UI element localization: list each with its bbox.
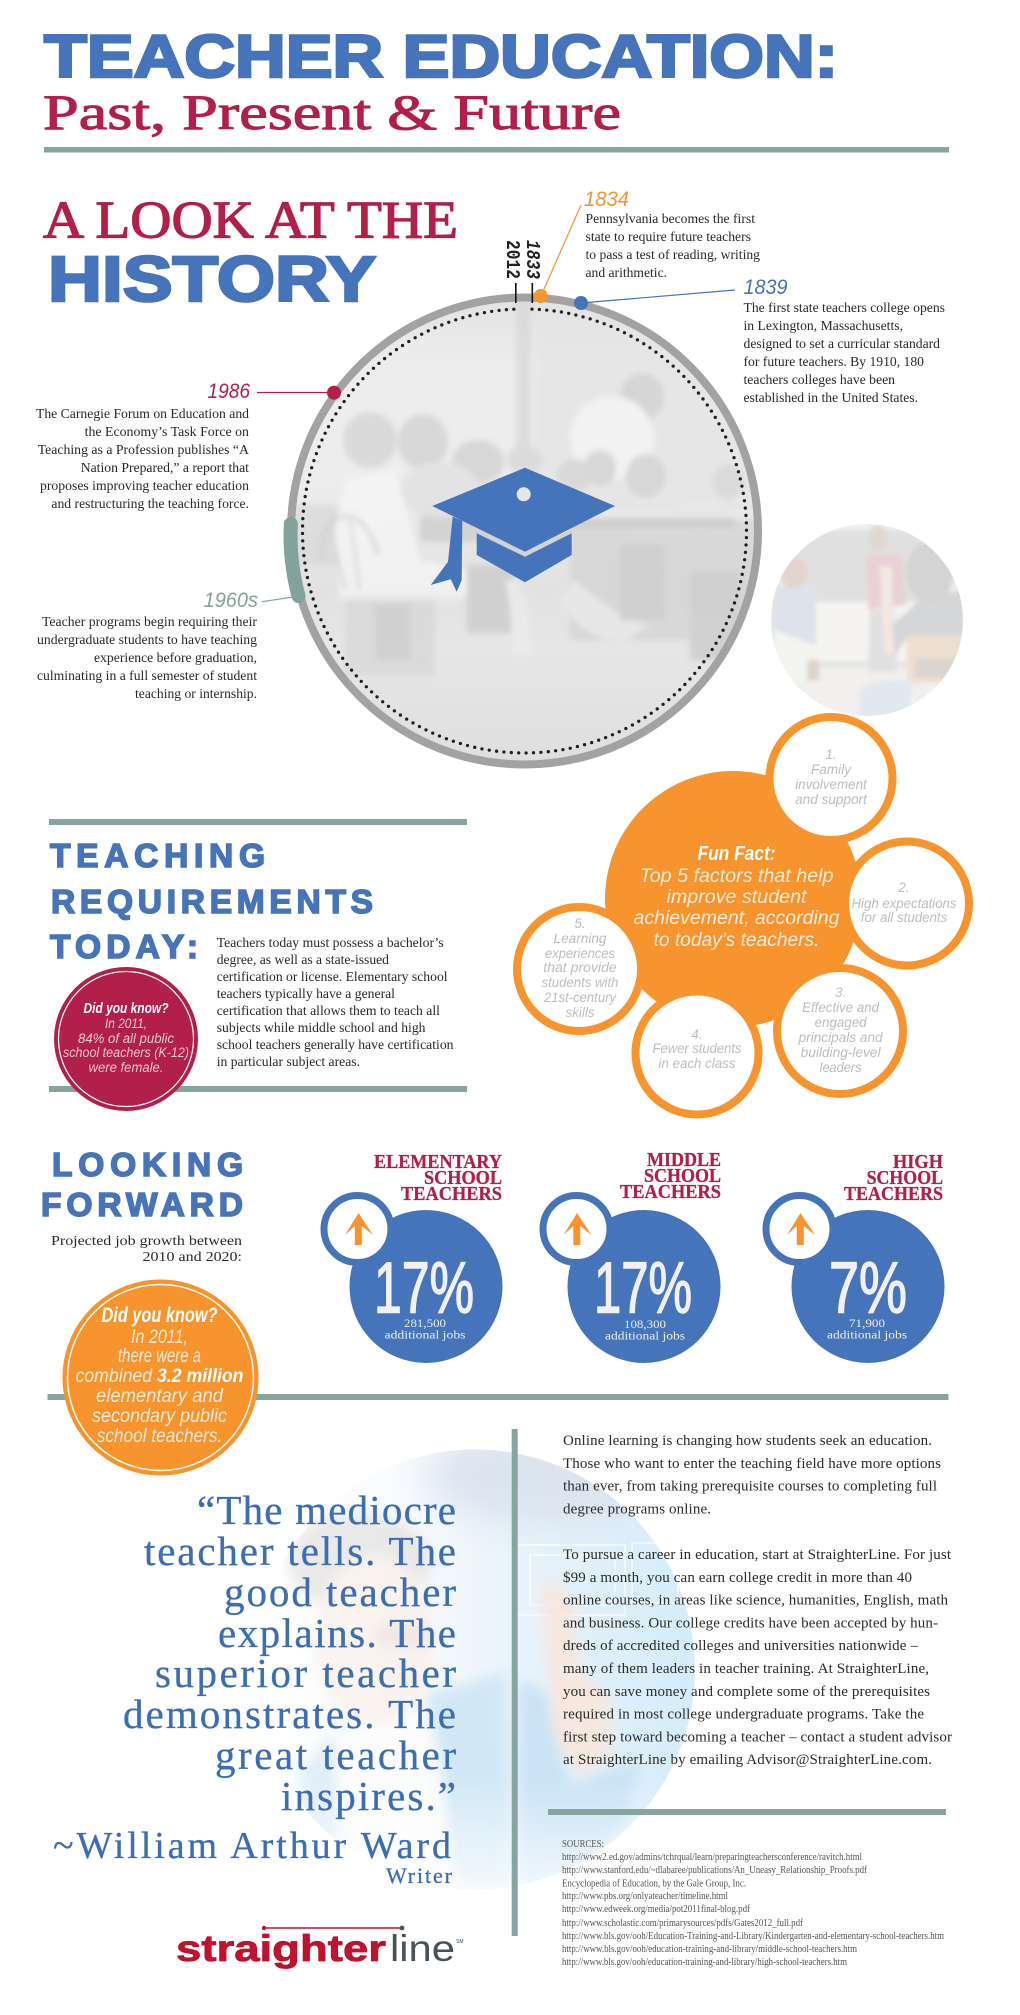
text block: call to action: you can save money and complete some of the prerequisites [563, 1684, 930, 1700]
stat: middle school teachers: 17% [594, 1248, 692, 1328]
callout: did you know, 3.2 million: Did you know? [102, 1304, 218, 1327]
callout: did you know, 3.2 million: school teachers. [97, 1426, 222, 1447]
stat: high school teachers: SCHOOL [867, 1167, 943, 1189]
stat: middle school teachers: additional jobs [605, 1328, 685, 1342]
stat: elementary school teachers: 17% [374, 1248, 474, 1328]
panel: teaching requirements today: REQUIREMENTS [51, 884, 373, 921]
sources list: http://www.pbs.org/onlyateacher/timeline.html [562, 1891, 728, 1902]
factor 5: 21st-century [543, 990, 617, 1005]
year ticks 2012 and 1833 [501, 240, 543, 303]
text block: call to action: $99 a month, you can earn college credit in more than 40 [563, 1570, 912, 1586]
logo: straighterline: straighter [176, 1928, 386, 1969]
timeline event: 1960s: teaching or internship. [135, 687, 257, 702]
panel: fun fact, top 5 factors [517, 717, 969, 1114]
icon: up arrow [345, 1213, 373, 1245]
text block [217, 936, 454, 1070]
text block: call to action: and business. Our college credits have been accepted by hun- [563, 1615, 938, 1631]
heading: a look at the history [43, 192, 458, 315]
timeline event: 1834: Pennsylvania becomes the first [586, 212, 755, 227]
factor 5 [517, 907, 641, 1031]
factor 3 [777, 968, 903, 1094]
text block: certification that allows them to teach all [217, 1004, 440, 1019]
stat: middle school teachers: MIDDLE [647, 1149, 721, 1171]
factor 5: Learning [554, 931, 607, 946]
text block: Teachers today must possess a bachelor’s [217, 936, 444, 951]
timeline event: 1839: The first state teachers college opens [744, 301, 945, 316]
subhead [51, 1234, 242, 1265]
timeline event: 1960s: culminating in a full semester of student [37, 669, 257, 684]
stat: elementary school teachers [324, 1151, 502, 1363]
icon: graduation cap [431, 468, 615, 592]
sources list: http://www.bls.gov/ooh/Education-Training-and-Library/Kindergarten-and-elementary-school-teachers.htm [562, 1931, 944, 1942]
logo: straighterline [176, 1926, 464, 1969]
outer ring [291, 298, 758, 764]
timeline event: 1839: in Lexington, Massachusetts, [744, 319, 903, 334]
sources list [562, 1839, 944, 1968]
quote: explains. The [218, 1610, 456, 1656]
panel: looking forward [41, 1147, 948, 1476]
factor 3: building-level [801, 1045, 882, 1060]
quote: teacher tells. The [144, 1528, 456, 1574]
sources list: http://www.bls.gov/ooh/education-training-and-library/high-school-teachers.htm [562, 1957, 847, 1968]
quote: inspires.” [281, 1773, 456, 1819]
heading: LOOKING [52, 1147, 243, 1184]
stat: middle school teachers: 108,300 [624, 1317, 666, 1331]
text block: call to action: degree programs online. [563, 1501, 711, 1517]
timeline event: 1986: Nation Prepared,” a report that [81, 461, 249, 476]
timeline event: 1839: designed to set a curricular standard [744, 337, 940, 352]
factor 1: and support [795, 792, 868, 807]
timeline event: 1834: state to require future teachers [586, 230, 751, 245]
callout: did you know, 3.2 million: combined 3.2 million [76, 1366, 244, 1387]
quote [53, 1487, 456, 1888]
subhead: Projected job growth between [51, 1234, 242, 1249]
timeline event: 1960s: experience before graduation, [94, 651, 257, 666]
factor 5: skills [566, 1005, 595, 1020]
quote: great teacher [215, 1732, 456, 1778]
photo: modern classroom [771, 524, 965, 720]
timeline event: 1986: The Carnegie Forum on Education and [36, 407, 249, 422]
factor 4: Fewer students [652, 1041, 742, 1056]
subtitle: Past, Present & Future [43, 84, 621, 140]
text block: degree, as well as a state-issued [217, 953, 389, 968]
year ticks 2012 and 1833: 2012 [501, 240, 523, 279]
factor 5: that provide [543, 960, 617, 975]
sources list: http://www.edweek.org/media/pot2011final-blog.pdf [562, 1904, 751, 1915]
fun fact circle: to today’s teachers. [654, 930, 820, 951]
factor 3: leaders [820, 1060, 862, 1075]
timeline event: 1960s: Teacher programs begin requiring their [42, 615, 257, 630]
quote: demonstrates. The [123, 1691, 456, 1737]
stat: elementary school teachers: SCHOOL [424, 1167, 502, 1189]
timeline event: 1834: to pass a test of reading, writing [586, 248, 760, 263]
factor 1: involvement [795, 777, 868, 792]
timeline event: 1960s [37, 524, 298, 702]
photo: vintage classroom [287, 293, 765, 769]
factor 3: engaged [815, 1015, 867, 1030]
panel: teaching requirements today: TODAY: [50, 929, 198, 966]
sources list: http://www.bls.gov/ooh/education-training-and-library/middle-school-teachers.htm [562, 1944, 857, 1955]
callout: did you know, 84% female [54, 967, 198, 1111]
timeline event: 1986 [36, 380, 341, 512]
timeline event: 1839: 1839 [744, 276, 788, 299]
fun fact circle: achievement, according [634, 908, 840, 929]
year ticks 2012 and 1833: 1833 [521, 240, 543, 280]
panel: looking forward: FORWARD [41, 1187, 243, 1224]
attribution: Writer [386, 1863, 453, 1888]
panel: teaching requirements today [49, 819, 467, 1111]
timeline event: 1839: teachers colleges have been [744, 373, 895, 388]
stat: elementary school teachers: TEACHERS [401, 1183, 502, 1205]
factor 3: principals and [798, 1030, 883, 1045]
attribution [53, 1825, 453, 1888]
factor 4 [636, 992, 758, 1114]
factor 5: 5. [574, 916, 586, 931]
sources list: http://www.scholastic.com/primarysources/pdfs/Gates2012_full.pdf [562, 1918, 804, 1929]
attribution: ~William Arthur Ward [53, 1825, 451, 1867]
text block: subjects while middle school and high [217, 1021, 426, 1036]
text block: school teachers generally have certification [217, 1038, 454, 1053]
callout: did you know, 84% female: were female. [88, 1060, 164, 1075]
callout: did you know, 84% female: 84% of all public [78, 1031, 174, 1046]
callout: did you know, 84% female: school teachers (K-12) [63, 1045, 189, 1060]
stat: high school teachers: HIGH [893, 1151, 943, 1173]
logo: straighterline: SM [456, 1939, 464, 1945]
stat: middle school teachers [543, 1149, 721, 1363]
timeline event: 1960s: 1960s [204, 589, 258, 612]
timeline event: 1839 [574, 276, 945, 406]
heading: a look at the history: HISTORY [48, 243, 376, 315]
quote: “The mediocre [197, 1487, 456, 1533]
text block: call to action: online courses, in areas like science, humanities, English, math [563, 1593, 948, 1609]
callout: did you know, 84% female: In 2011, [105, 1016, 147, 1031]
stat: elementary school teachers: 281,500 [404, 1316, 446, 1330]
text block: certification or license. Elementary school [217, 970, 448, 985]
stat: high school teachers: additional jobs [827, 1328, 907, 1342]
callout: did you know, 3.2 million: elementary and [96, 1386, 224, 1407]
timeline event: 1960s: undergraduate students to have teaching [37, 633, 257, 648]
main heading: TEACHER EDUCATION: [44, 23, 838, 90]
heading: TEACHING [50, 838, 265, 875]
stat: middle school teachers: TEACHERS [620, 1181, 721, 1203]
heading: a look at the history: A LOOK AT THE [43, 192, 458, 250]
text block: in particular subject areas. [217, 1055, 360, 1070]
factor 4: 4. [691, 1027, 703, 1042]
callout: did you know, 3.2 million [62, 1280, 258, 1476]
icon: up arrow [564, 1213, 592, 1245]
factor 1: Family [811, 762, 852, 777]
text block: call to action: required in most college undergraduate programs. Take the [563, 1707, 924, 1723]
factor 2: 2. [897, 880, 910, 895]
callout: did you know, 3.2 million: In 2011, [131, 1327, 188, 1348]
text block: call to action: To pursue a career in education, start at StraighterLine. For just [563, 1547, 952, 1563]
factor 2: for all students [861, 910, 947, 925]
timeline event: 1986: proposes improving teacher education [40, 479, 249, 494]
background student photo [285, 1450, 695, 1890]
quote: good teacher [224, 1569, 456, 1615]
sources list: http://www2.ed.gov/admins/tchrqual/learn/preparingteachersconference/ravitch.html [562, 1852, 862, 1863]
factor 5: students with [542, 975, 618, 990]
timeline event: 1986: Teaching as a Profession publishes “A [38, 443, 250, 458]
text block: call to action: at StraighterLine by emailing Advisor@StraighterLine.com. [563, 1752, 932, 1768]
timeline event: 1986: 1986 [208, 380, 250, 403]
icon: up arrow [787, 1213, 815, 1245]
text block: call to action: Those who want to enter the teaching field have more options [563, 1456, 941, 1472]
text block: call to action: than ever, from taking prerequisite courses to completing full [563, 1479, 937, 1495]
panel: history timeline circle [287, 240, 765, 769]
subhead: 2010 and 2020: [142, 1250, 242, 1265]
fun fact circle: Fun Fact: [698, 843, 776, 865]
stat: elementary school teachers: additional jobs [384, 1328, 466, 1342]
dotted ring [302, 309, 746, 753]
sources list: SOURCES: [562, 1839, 604, 1850]
text block: teachers typically have a general [217, 987, 395, 1002]
timeline event: 1834: 1834 [584, 188, 629, 211]
timeline event: 1986: the Economy’s Task Force on [85, 425, 249, 440]
callout: did you know, 3.2 million: there were a [118, 1346, 201, 1367]
factor 3: Effective and [802, 1000, 880, 1015]
fun fact circle [605, 771, 861, 1027]
timeline event: 1834: and arithmetic. [586, 266, 667, 281]
stat: elementary school teachers: ELEMENTARY [374, 1151, 502, 1173]
timeline event: 1834 [534, 188, 760, 303]
timeline event: 1839: established in the United States. [744, 391, 918, 406]
title [43, 23, 838, 140]
sources list: Encyclopedia of Education, by the Gale Group, Inc. [562, 1878, 746, 1890]
quote: superior teacher [155, 1650, 456, 1696]
stat: high school teachers: TEACHERS [844, 1183, 943, 1205]
fun fact circle: improve student [666, 887, 807, 908]
stat: high school teachers: 71,900 [849, 1316, 885, 1330]
factor 2: High expectations [852, 896, 957, 911]
factor 5: experiences [545, 946, 615, 961]
callout: did you know, 3.2 million: secondary public [92, 1406, 227, 1427]
sources list: http://www.stanford.edu/~dlabaree/publications/An_Uneasy_Relationship_Proofs.pdf [562, 1865, 868, 1876]
stat: middle school teachers: SCHOOL [644, 1165, 721, 1187]
timeline event: 1839: for future teachers. By 1910, 180 [744, 355, 924, 370]
text block: call to action: Online learning is changing how students seek an education. [563, 1433, 932, 1449]
text block: call to action: dreds of accredited colleges and universities nationwide – [563, 1638, 918, 1654]
logo: straighterline: line [390, 1928, 455, 1969]
callout: did you know, 84% female: Did you know? [84, 1000, 168, 1017]
stat: high school teachers [766, 1151, 944, 1363]
text block: call to action: many of them leaders in teacher training. At StraighterLine, [563, 1661, 929, 1677]
text block: call to action: first step toward becoming a teacher – contact a student advisor [563, 1729, 952, 1745]
text block: call to action [563, 1433, 952, 1768]
factor 3: 3. [835, 985, 846, 1000]
factor 4: in each class [658, 1056, 736, 1071]
factor 1 [770, 717, 892, 840]
factor 2 [845, 842, 969, 966]
fun fact circle: Top 5 factors that help [640, 866, 834, 887]
timeline event: 1986: and restructuring the teaching force. [51, 497, 249, 512]
stat: high school teachers: 7% [829, 1248, 907, 1328]
factor 1: 1. [825, 747, 837, 762]
